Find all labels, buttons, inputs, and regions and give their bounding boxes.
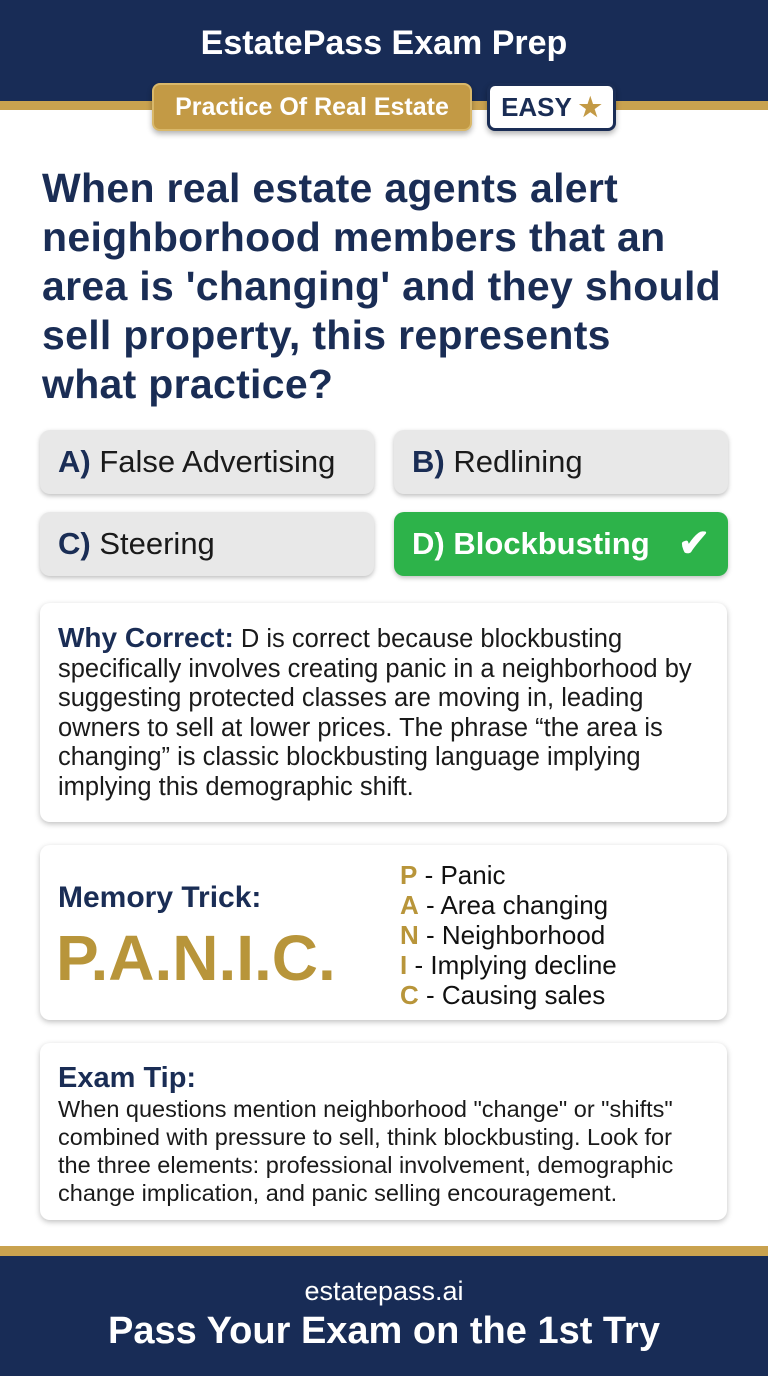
- question: [42, 165, 721, 407]
- memory heading: Memory Trick:: [58, 881, 261, 914]
- footer url: estatepass.ai: [304, 1276, 464, 1306]
- option D correct: [394, 512, 728, 576]
- mnemonic list: [400, 860, 617, 1010]
- mnemonic list: N - Neighborhood: [400, 920, 605, 950]
- panel: why correct: owners to sell at lower prices. The phrase “the area is: [58, 714, 663, 742]
- option A: [40, 430, 374, 494]
- badge: category: [152, 83, 472, 131]
- header gold line: [0, 101, 768, 110]
- option C: C) Steering: [58, 526, 215, 561]
- panel: memory trick: [40, 845, 727, 1020]
- badge: difficulty: EASY ★: [501, 92, 602, 122]
- option D correct: ✔: [678, 523, 710, 565]
- option D correct: D) Blockbusting: [412, 526, 650, 561]
- footer gold line: [0, 1246, 768, 1256]
- panel: why correct: changing” is classic blockbusting language implying: [58, 743, 641, 771]
- header band: [0, 0, 768, 101]
- panel: exam tip: change implication, and panic selling encouragement.: [58, 1180, 617, 1206]
- mnemonic list: C - Causing sales: [400, 980, 605, 1010]
- panel: why correct: implying this demographic shift.: [58, 772, 414, 800]
- option C: [40, 512, 374, 576]
- mnemonic list: A - Area changing: [400, 890, 608, 920]
- footer band: [0, 1256, 768, 1376]
- panel: why correct: suggesting protected classes are moving in, leading: [58, 684, 643, 712]
- question: sell property, this represents: [42, 312, 611, 358]
- question: what practice?: [42, 361, 333, 407]
- question: When real estate agents alert: [42, 165, 618, 211]
- option B: [394, 430, 728, 494]
- panel: why correct: specifically involves creating panic in a neighborhood by: [58, 654, 692, 682]
- panel: exam tip: [40, 1043, 727, 1220]
- mnemonic list: P - Panic: [400, 860, 506, 890]
- title: EstatePass Exam Prep: [201, 24, 567, 62]
- panel: exam tip: Exam Tip:: [58, 1062, 196, 1094]
- badge: category: Practice Of Real Estate: [175, 93, 449, 121]
- badge: difficulty: [487, 83, 616, 131]
- footer tagline: Pass Your Exam on the 1st Try: [108, 1310, 660, 1352]
- option A: A) False Advertising: [58, 444, 335, 479]
- panel: exam tip: combined with pressure to sell, think blockbusting. Look for: [58, 1124, 672, 1150]
- panel: exam tip: When questions mention neighborhood "change" or "shifts": [58, 1096, 673, 1122]
- mnemonic list: I - Implying decline: [400, 950, 617, 980]
- panel: exam tip: the three elements: professional involvement, demographic: [58, 1152, 673, 1178]
- panel: why correct: [40, 603, 727, 822]
- option B: B) Redlining: [412, 444, 583, 479]
- mnemonic: P.A.N.I.C.: [56, 922, 336, 994]
- panel: why correct: Why Correct: D is correct because blockbusting: [58, 622, 622, 653]
- question: area is 'changing' and they should: [42, 263, 721, 309]
- question: neighborhood members that an: [42, 214, 665, 260]
